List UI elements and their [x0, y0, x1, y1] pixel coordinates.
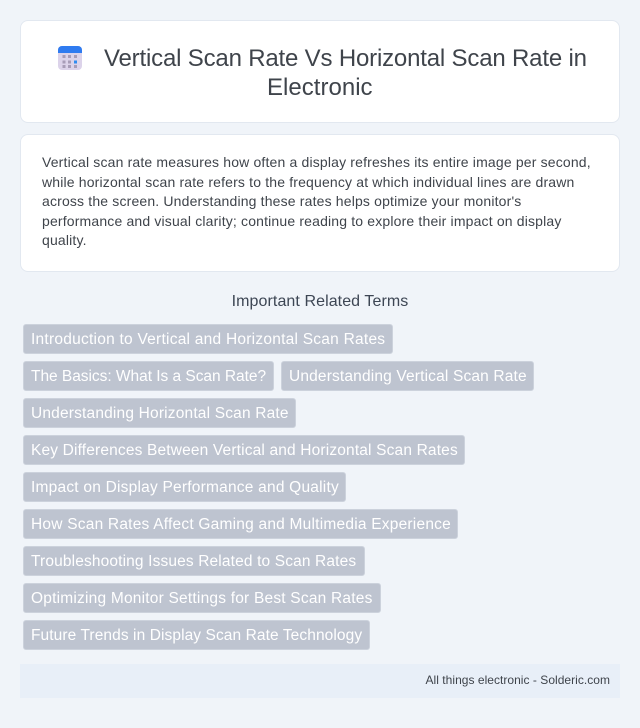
icon: calendar [58, 46, 82, 70]
title: Electronic [267, 74, 373, 101]
tag [23, 509, 458, 539]
title: Vertical Scan Rate Vs Horizontal Scan Rate in [104, 45, 587, 72]
related terms heading: Important Related Terms [232, 293, 408, 310]
intro paragraph: quality. [42, 232, 87, 248]
title card [20, 20, 620, 123]
intro paragraph: across the screen. Understanding these rates helps optimize your monitor's [42, 193, 521, 209]
tag: The Basics: What Is a Scan Rate? [31, 368, 266, 385]
tag: How Scan Rates Affect Gaming and Multimedia Experience [31, 516, 451, 533]
tag [23, 398, 296, 428]
tag [23, 472, 346, 502]
intro paragraph: while horizontal scan rate refers to the frequency at which individual lines are drawn [42, 174, 574, 190]
tag [281, 361, 534, 391]
tag: Understanding Vertical Scan Rate [289, 368, 527, 385]
tag: Introduction to Vertical and Horizontal Scan Rates [31, 331, 385, 348]
tag [23, 620, 370, 650]
tag [23, 583, 381, 613]
tag: Optimizing Monitor Settings for Best Scan Rates [31, 590, 373, 607]
intro paragraph [42, 154, 591, 248]
tag: Troubleshooting Issues Related to Scan Rates [31, 553, 356, 570]
tag: Key Differences Between Vertical and Horizontal Scan Rates [31, 442, 458, 459]
footer [20, 664, 620, 698]
intro paragraph: Vertical scan rate measures how often a display refreshes its entire image per second, [42, 154, 591, 170]
tag [23, 546, 365, 576]
intro text card [20, 134, 620, 272]
tag list [23, 324, 534, 650]
tag: Future Trends in Display Scan Rate Technology [31, 627, 362, 644]
title [104, 45, 587, 101]
tag [23, 435, 465, 465]
intro paragraph: performance and visual clarity; continue reading to explore their impact on display [42, 213, 562, 229]
footer credit: All things electronic - Solderic.com [426, 673, 610, 687]
tag [23, 361, 274, 391]
tag: Understanding Horizontal Scan Rate [31, 405, 289, 422]
tag [23, 324, 393, 354]
tag: Impact on Display Performance and Quality [31, 479, 339, 496]
